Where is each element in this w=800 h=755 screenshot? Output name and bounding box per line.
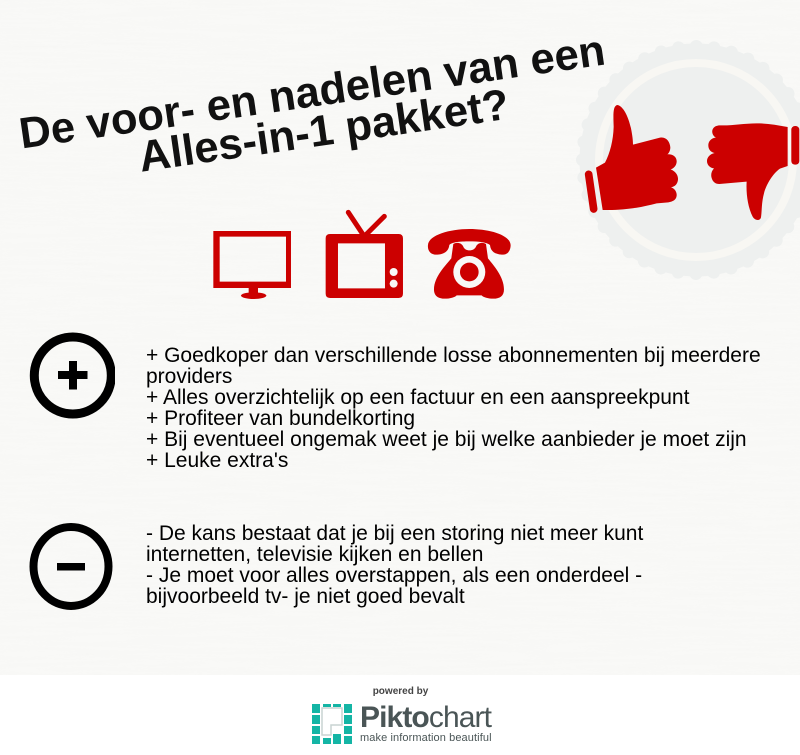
text block: nadelen: - De kans bestaat dat je bij een storing niet meer kunt bbox=[146, 522, 643, 545]
text block: voordelen bbox=[146, 344, 761, 472]
text block: nadelen: - Je moet voor alles overstappen, als een onderdeel - bbox=[146, 564, 642, 587]
powered by label: powered by bbox=[373, 686, 428, 697]
tagline: make information beautiful bbox=[360, 732, 492, 744]
text block: voordelen: + Goedkoper dan verschillende losse abonnementen bij meerdere bbox=[146, 344, 761, 367]
text block: voordelen: + Leuke extra's bbox=[146, 449, 288, 472]
icon: telephone bbox=[428, 229, 511, 299]
footer: powered by Piktochart bbox=[312, 686, 492, 744]
text block: voordelen: + Alles overzichtelijk op een factuur en een aanspreekpunt bbox=[146, 386, 689, 409]
title: De voor- en nadelen van een bbox=[16, 27, 608, 158]
text block: voordelen: + Profiteer van bundelkorting bbox=[146, 407, 415, 430]
icon: minus circle bbox=[34, 527, 108, 606]
icon: Piktochart logo bbox=[312, 704, 352, 744]
icon: thumb down bbox=[707, 123, 799, 220]
icon: television bbox=[326, 212, 403, 298]
text block: voordelen: providers bbox=[146, 365, 232, 388]
title: Alles-in-1 pakket? bbox=[136, 81, 512, 182]
text block: nadelen: internetten, televisie kijken en bellen bbox=[146, 543, 483, 566]
icon: plus circle bbox=[34, 337, 111, 414]
text block: nadelen bbox=[146, 522, 644, 608]
text block: nadelen: bijvoorbeeld tv- je niet goed bevalt bbox=[146, 585, 465, 608]
text block: voordelen: + Bij eventueel ongemak weet je bij welke aanbieder je moet zijn bbox=[146, 428, 747, 451]
icon: computer monitor bbox=[213, 231, 291, 299]
icon: scalloped seal bbox=[580, 44, 800, 276]
Piktochart wordmark: Piktochart bbox=[360, 701, 491, 734]
icon: thumb up bbox=[589, 105, 678, 210]
